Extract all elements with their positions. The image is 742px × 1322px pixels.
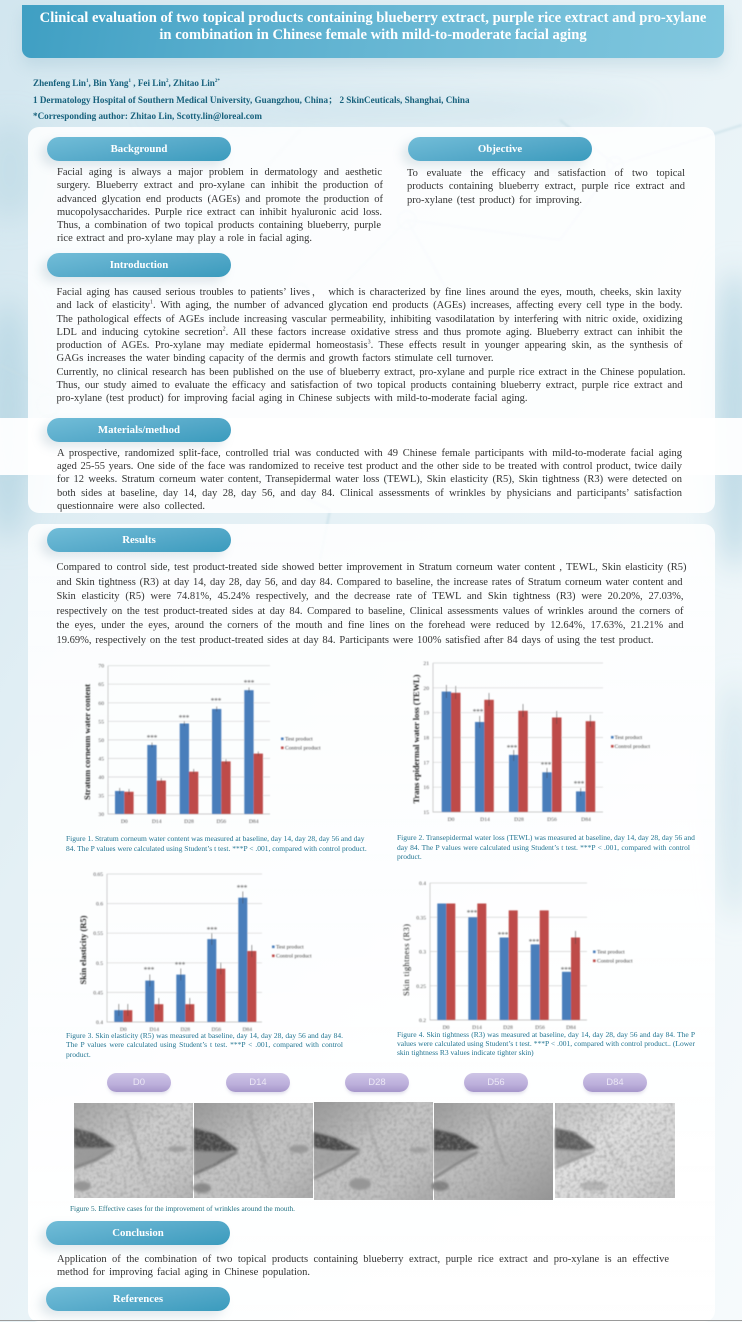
chart 1: stratum corneum water content: ***: [244, 679, 255, 687]
chart 2: trans epidermal water loss: D0: [448, 817, 455, 823]
text: introduction: LDL and inducing cytokine secretion2. All these factors increase oxidative stress and thus promote aging. Blueberry extract can inhibit the: [56, 326, 683, 338]
chart 4: skin tightness: ***: [561, 966, 572, 974]
chart 1: stratum corneum water content: 35: [98, 794, 104, 800]
text: results: 19.69%, respectively on the test product-treated sides at day 84. Participants were 100% satisfied after 84 days of using the test product.: [56, 634, 654, 646]
caption: figure 2: Figure 2. Transepidermal water loss (TEWL) was measured at baseline, day 14, day 28, day 56 and: [397, 833, 695, 842]
text: background: Facial aging is always a major problem in dermatology and aesthetic: [57, 167, 382, 178]
caption: figure 3: Figure 3. Skin elasticity (R5) was measured at baseline, day 14, day 28, day 56 and day 84.: [66, 1031, 343, 1040]
heading: Introduction: [47, 253, 231, 277]
text: results: [56, 562, 686, 646]
chart 4: skin tightness: Test product: [597, 950, 625, 956]
text: background: [57, 167, 383, 244]
title bar: in combination in Chinese female with mild-to-moderate facial aging: [159, 27, 587, 43]
chart 1: stratum corneum water content: 50: [98, 738, 104, 744]
caption: figure 1: [66, 834, 367, 853]
text: introduction: pro-xylane (test product) for improving facial aging in Chinese subjects with mild-to-moderate facial aging.: [56, 393, 528, 404]
chart 2: trans epidermal water loss: ***: [473, 708, 484, 716]
chart 1: stratum corneum water content: Test product: [285, 736, 313, 742]
text: conclusion: [57, 1254, 669, 1278]
chart 2: trans epidermal water loss: 19: [423, 711, 429, 717]
text: materials and method: both sides at baseline, day 14, day 28, day 56, and day 84. Clinical assessments of wrinkles by physicians and participants’ satisfaction: [57, 488, 682, 499]
chart 2: trans epidermal water loss: 17: [423, 760, 429, 766]
chart 2: trans epidermal water loss: Test product: [614, 735, 643, 741]
label: D28: [345, 1073, 409, 1092]
text: background: surgery. Blueberry extract and pro-xylane can inhibit the production of: [57, 180, 383, 191]
chart 1: stratum corneum water content: 45: [98, 756, 104, 762]
chart 4: skin tightness: 0.35: [416, 915, 426, 921]
heading: Materials/method: Materials/method: [98, 424, 180, 436]
heading: Conclusion: Conclusion: [112, 1227, 164, 1239]
label: D14: D14: [249, 1077, 267, 1088]
chart 4: skin tightness: D56: [535, 1025, 545, 1031]
heading: Materials/method: [47, 418, 231, 442]
text: introduction: Thus, our study aimed to evaluate the efficacy and satisfaction of two topical products containing blueberry extract, purple rice extract and: [56, 380, 682, 391]
caption: figure 1: Figure 1. Stratum corneum water content was measured at baseline, day 14, day 28, day 56 and day: [66, 834, 364, 843]
chart 3: skin elasticity: ***: [144, 966, 155, 974]
chart 4: skin tightness: 0.3: [419, 950, 426, 956]
charts: [78, 661, 651, 1033]
text: conclusion: Application of the combination of two topical products containing blueberry extract, purple rice extract and pro-xylane is an effective: [57, 1254, 669, 1265]
text: introduction: The pathological effects of AGEs include increasing vascular permeability, inhibiting vasodilatation by interfering with nitric oxide, oxidizing: [56, 314, 682, 325]
panel: results and conclusion: [28, 524, 715, 1322]
photo D14: [193, 1103, 313, 1198]
heading: References: [46, 1287, 230, 1311]
title bar: [22, 5, 724, 58]
chart 1: stratum corneum water content: 30: [98, 812, 104, 818]
chart 4: skin tightness: ***: [498, 931, 509, 939]
label: D0: [107, 1073, 171, 1092]
chart 3: skin elasticity: D56: [211, 1027, 221, 1033]
chart 2: trans epidermal water loss: ***: [507, 744, 518, 752]
chart 3: skin elasticity: ***: [175, 961, 186, 969]
label: D28: D28: [368, 1077, 386, 1088]
chart 4: skin tightness: D14: [472, 1025, 482, 1031]
chart 1: stratum corneum water content: Control product: [285, 746, 321, 752]
text: background: advanced glycation end products (AGEs) and promote the production of: [57, 194, 383, 204]
chart 3: skin elasticity: Skin elasticity (R5): [78, 915, 88, 984]
chart 1: stratum corneum water content: D84: [249, 819, 259, 825]
photo strip: wrinkles around the mouth: [74, 1102, 675, 1200]
caption: figure 3: [66, 1031, 343, 1059]
heading: Results: [47, 528, 231, 552]
heading: Background: Background: [111, 143, 167, 155]
label: D56: D56: [487, 1077, 505, 1088]
chart 2: trans epidermal water loss: Trans epidermal water loss (TEWL): [411, 674, 421, 804]
caption: figure 4: values were calculated using Student’s t test. ***P < .001, compared with control product.. (Lower: [397, 1039, 695, 1048]
chart 1: stratum corneum water content: D28: [184, 819, 194, 825]
chart 4: skin tightness: 0.2: [419, 1018, 426, 1024]
chart 4: skin tightness: Skin tightness (R3): [401, 924, 411, 996]
text: materials and method: A prospective, randomized split-face, controlled trial was conducted with 49 Chinese female participants with mild-to-moderate facial aging: [57, 448, 682, 459]
chart 3: skin elasticity: 0.6: [96, 902, 103, 908]
chart 1: stratum corneum water content: 70: [98, 664, 104, 670]
chart 1: stratum corneum water content: ***: [179, 714, 190, 722]
chart 4: skin tightness: ***: [467, 909, 478, 917]
chart 1: stratum corneum water content: [82, 664, 321, 825]
chart 1: stratum corneum water content: 60: [98, 701, 104, 707]
heading: Conclusion: [46, 1221, 230, 1245]
text: introduction: and lack of elasticity1. With aging, the number of advanced glycation end products (AGEs) increases, affecting every cell type in the body.: [56, 300, 682, 311]
chart 1: stratum corneum water content: ***: [211, 697, 222, 705]
chart 1: stratum corneum water content: 40: [98, 775, 104, 781]
chart 2: trans epidermal water loss: D28: [514, 817, 524, 823]
label: D84: [583, 1073, 647, 1092]
heading: Results: Results: [122, 534, 156, 546]
text: conclusion: method for improving facial aging in Chinese population.: [57, 1267, 310, 1278]
chart 2: trans epidermal water loss: 20: [423, 686, 429, 692]
photo D84: [555, 1103, 675, 1198]
heading: References: References: [113, 1293, 163, 1305]
text: materials and method: aged 25-55 years. One side of the face was randomized to receive test product and the other side to be treated with control product, twice daily: [57, 461, 682, 472]
text: materials and method: [57, 448, 682, 512]
text: introduction: production of AGEs. Pro-xylane may mediate epidermal homeostasis3. These effects result in younger appearing skin, as the synthesis of: [56, 340, 682, 351]
caption: figure 4: [397, 1030, 695, 1057]
caption: figure 2: day 84. The P values were calculated using Student’s t test. ***P < .001, compared with control: [397, 843, 690, 852]
chart 4: skin tightness: 0.4: [419, 881, 426, 887]
text: results: and Skin tightness (R3) at day 14, day 28, day 56, and day 84. Compared to baseline, the increase rates of Stratum corneum water content and: [56, 576, 682, 588]
chart 3: skin elasticity: 0.4: [96, 1020, 103, 1026]
chart 4: skin tightness: D84: [566, 1025, 576, 1031]
chart 3: skin elasticity: [78, 872, 312, 1033]
caption: figure 2: [397, 833, 695, 861]
heading: Objective: Objective: [478, 143, 522, 155]
chart 4: skin tightness: D28: [503, 1025, 513, 1031]
chart 2: trans epidermal water loss: 18: [423, 736, 429, 742]
text: objective: products containing blueberry extract, purple rice extract and: [407, 181, 685, 192]
photo D28: [314, 1102, 433, 1200]
chart 1: stratum corneum water content: D14: [152, 819, 162, 825]
heading: Background: [47, 137, 231, 161]
text: introduction: Currently, no clinical research has been published on the use of blueberry extract, pro-xylane and purple rice extract in the Chinese population.: [56, 367, 686, 378]
photo D0: [73, 1103, 193, 1198]
text: results: the eyes, under the eyes, around the corners of the mouth and fine lines on the forehead were reduced by 12.64%, 17.63%, 21.21% and: [56, 620, 684, 631]
corresponding author: *Corresponding author: Zhitao Lin, Scotty.lin@loreal.com: [33, 111, 262, 121]
text: objective: [407, 168, 685, 206]
caption: figure 1: 84. The P values were calculated using Student’s t test. ***P < .001, compared with control product.: [66, 844, 367, 853]
caption: figure 3: product.: [66, 1050, 91, 1059]
text: materials and method: questionnaire were also collected.: [57, 501, 205, 512]
chart 3: skin elasticity: Control product: [276, 954, 312, 960]
chart 4: skin tightness: Control product: [597, 958, 633, 964]
chart 2: trans epidermal water loss: ***: [541, 761, 552, 769]
chart 2: trans epidermal water loss: [411, 661, 651, 823]
text: objective: pro-xylane (test product) for improving.: [407, 194, 582, 206]
chart 3: skin elasticity: 0.5: [96, 961, 103, 967]
text: background: Thus, a combination of two topical products containing blueberry, purple: [57, 220, 381, 231]
text: objective: To evaluate the efficacy and satisfaction of two topical: [407, 168, 685, 179]
chart 3: skin elasticity: D84: [242, 1027, 252, 1033]
text: background: mucopolysaccharides. Purple rice extract can inhibit hyaluronic acid loss.: [57, 207, 382, 218]
text: materials and method: for 12 weeks. Stratum corneum water content, Transepidermal water loss (TEWL), Skin elasticity (R5), Skin tightness (R3) were detected on: [57, 474, 682, 485]
chart 1: stratum corneum water content: 55: [98, 719, 104, 725]
chart 1: stratum corneum water content: ***: [147, 734, 158, 742]
label: D0: D0: [133, 1077, 145, 1088]
chart 3: skin elasticity: ***: [237, 884, 248, 892]
chart 2: trans epidermal water loss: ***: [574, 780, 585, 788]
caption: figure 3: The P values were calculated using Student’s t test. ***P < .001, compared with control: [66, 1040, 343, 1049]
label: D56: [464, 1073, 528, 1092]
chart 2: trans epidermal water loss: 16: [423, 785, 429, 791]
chart 3: skin elasticity: D14: [149, 1027, 159, 1033]
chart 4: skin tightness: D0: [443, 1025, 450, 1031]
chart 1: stratum corneum water content: 65: [98, 682, 104, 688]
panel: upper sections: [28, 127, 715, 513]
chart 3: skin elasticity: Test product: [276, 944, 304, 950]
label: D84: D84: [606, 1077, 624, 1088]
chart 3: skin elasticity: 0.55: [93, 931, 103, 937]
heading: Introduction: Introduction: [110, 259, 168, 271]
text: results: Compared to control side, test product-treated side showed better improvement in Stratum corneum water content , TEWL, Skin elasticity (R5): [56, 562, 686, 573]
chart 2: trans epidermal water loss: D14: [480, 817, 490, 823]
author names: Zhenfeng Lin1, Bin Yang1 , Fei Lin2, Zhitao Lin2*: [33, 78, 220, 88]
text: results: Skin elasticity (R5) were 74.81%, 45.24% respectively, and the decrease rate of TEWL and Skin tightness (R3) were 20.20%, 27.03%,: [56, 591, 684, 602]
chart 4: skin tightness: [401, 881, 633, 1031]
caption: figure 2: product.: [397, 852, 422, 861]
chart 1: stratum corneum water content: D56: [216, 819, 226, 825]
text: introduction: [56, 287, 686, 404]
chart 3: skin elasticity: ***: [207, 926, 218, 934]
title bar: Clinical evaluation of two topical products containing blueberry extract, purple rice extract and pro-xylane: [40, 10, 706, 26]
chart 1: stratum corneum water content: D0: [121, 819, 128, 825]
chart 3: skin elasticity: D28: [180, 1027, 190, 1033]
caption: figure 4: Figure 4. Skin tightness (R3) was measured at baseline, day 14, day 28, day 56 and day 84. The P: [397, 1030, 695, 1039]
chart 1: stratum corneum water content: Stratum corneum water content: [82, 684, 92, 800]
chart 2: trans epidermal water loss: 15: [423, 810, 429, 816]
heading: Objective: [408, 137, 592, 161]
text: background: rice extract and pro-xylane may play a role in facial aging.: [57, 233, 312, 244]
text: results: respectively on the test product-treated sides at day 84. Compared to baseline, Clinical assessments values of wrinkles around the corners of: [56, 606, 684, 616]
chart 2: trans epidermal water loss: Control product: [614, 744, 651, 750]
text: introduction: Facial aging has caused serious troubles to patients’ lives， which is characterized by fine lines around the eyes, mouth, cheeks, skin laxity: [56, 287, 682, 298]
text: introduction: GAGs increases the water binding capacity of the dermis and growth factors stimulate cell turnover.: [56, 353, 494, 364]
chart 2: trans epidermal water loss: D84: [581, 817, 591, 823]
chart 4: skin tightness: ***: [529, 938, 540, 946]
photo D56: [431, 1103, 553, 1200]
chart 3: skin elasticity: 0.65: [93, 872, 103, 878]
caption: figure 5: Figure 5. Effective cases for the improvement of wrinkles around the mouth.: [70, 1204, 295, 1213]
chart 4: skin tightness: 0.25: [416, 984, 426, 990]
label: D14: [226, 1073, 290, 1092]
chart 3: skin elasticity: 0.45: [93, 990, 103, 996]
affiliations: 1 Dermatology Hospital of Southern Medical University, Guangzhou, China； 2 SkinCeuticals, Shanghai, China: [33, 95, 470, 105]
caption: figure 4: skin tightness R3 values indicate tighter skin): [397, 1048, 534, 1057]
bottom rule: [0, 1320, 742, 1321]
chart 2: trans epidermal water loss: 21: [423, 661, 429, 667]
chart 2: trans epidermal water loss: D56: [547, 817, 557, 823]
white band behind materials heading: [0, 418, 742, 475]
chart 3: skin elasticity: D0: [120, 1027, 127, 1033]
